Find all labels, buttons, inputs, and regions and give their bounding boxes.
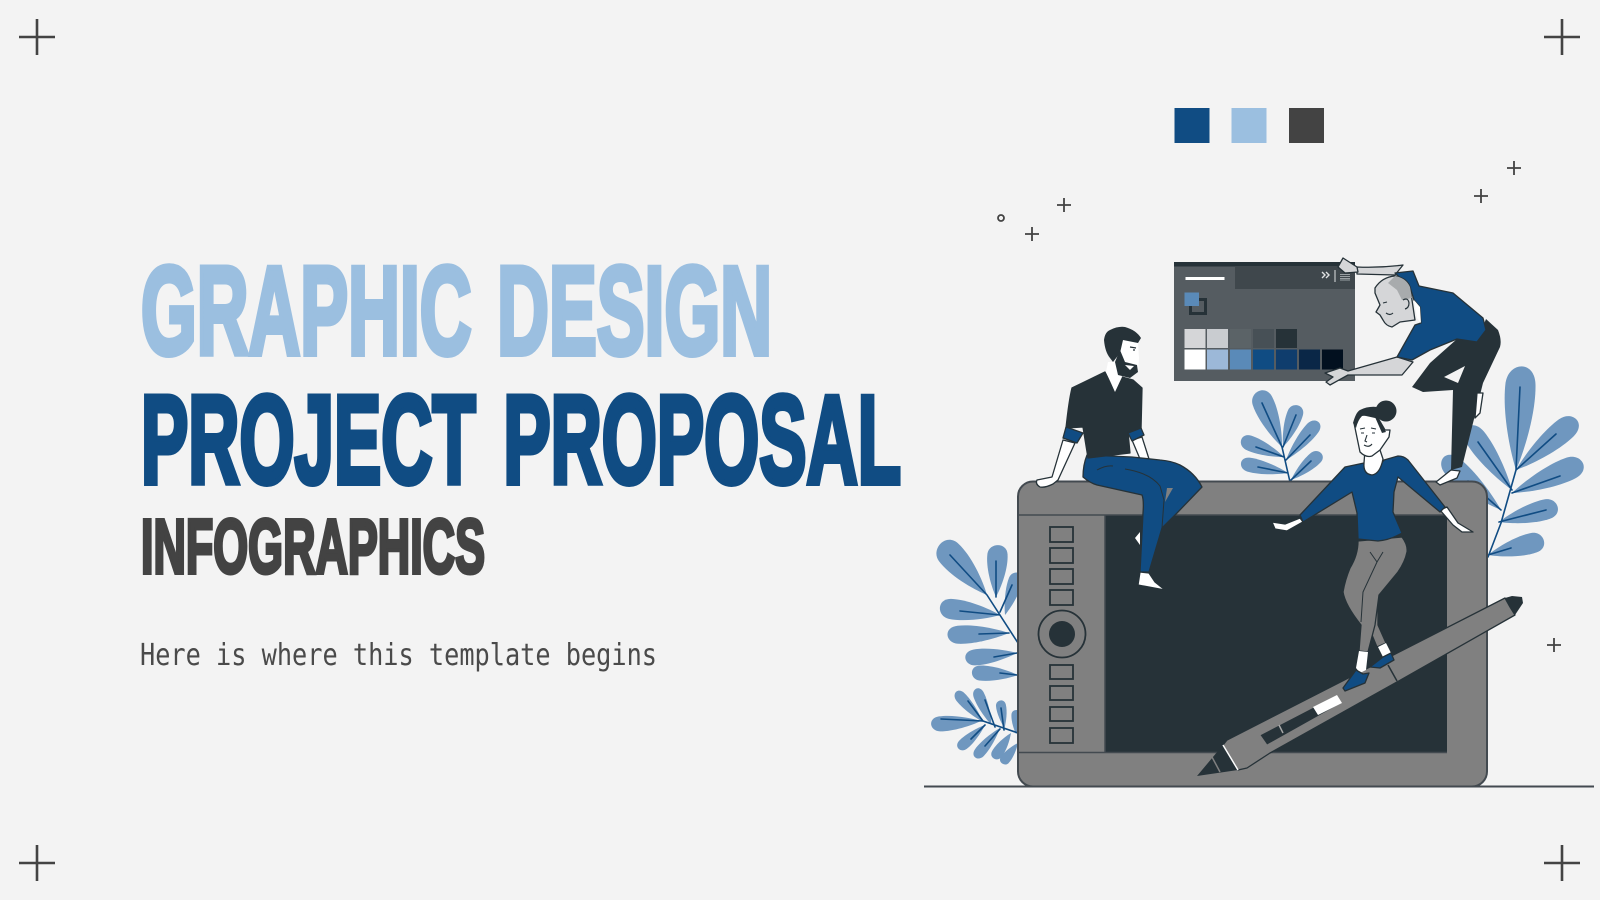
ground line: [924, 786, 1594, 788]
face: [1118, 340, 1139, 378]
hair: [1104, 327, 1141, 362]
front leg: [1343, 537, 1407, 652]
back leg: [1368, 610, 1386, 647]
facial features: [1383, 302, 1393, 314]
panel menu icons: [1322, 270, 1350, 282]
man bending near panel: [1325, 258, 1501, 485]
face: [1354, 414, 1390, 456]
trousers: [1083, 455, 1202, 572]
beard: [1115, 350, 1138, 378]
drawing tablet: [1018, 482, 1487, 786]
tablet buttons: [1050, 527, 1073, 743]
standing foot: [1436, 470, 1460, 485]
left hand: [1272, 518, 1303, 531]
title: infographics: INFOGRAPHICS: [141, 504, 485, 590]
back foot: [1135, 532, 1140, 545]
stylus pen: [1197, 596, 1523, 776]
trouser creases: [1097, 466, 1164, 528]
head: [1375, 276, 1415, 327]
trousers: [1412, 319, 1501, 470]
tablet dial: [1038, 610, 1086, 658]
shoe: [1343, 670, 1369, 691]
subtitle: Here is where this template begins: [140, 638, 657, 673]
title: graphic design: GRAPHIC DESIGN: [141, 242, 772, 381]
back shoe: [1370, 653, 1394, 668]
woman standing on pen: [1272, 400, 1473, 691]
plant: right: [1436, 366, 1587, 565]
small sparkle crosses: [998, 161, 1561, 652]
near arm and hand: [1036, 440, 1075, 487]
neck and chest: [1364, 450, 1383, 475]
lower arm and hand: [1325, 357, 1413, 385]
pen tip: [1197, 745, 1238, 776]
sock: [1356, 651, 1368, 673]
foot: [1138, 572, 1165, 590]
gap between the legs: [1165, 488, 1173, 502]
far arm: [1132, 437, 1149, 459]
right hand: [1440, 507, 1473, 532]
colour panel window: [1174, 262, 1355, 381]
shirt: [1066, 372, 1142, 458]
plant: centre: [1238, 387, 1326, 485]
man sitting on tablet: [1036, 327, 1202, 590]
upper hand: [1338, 258, 1358, 273]
colour palette squares: [1174, 108, 1324, 143]
pen cap: [1505, 596, 1523, 615]
pen button: [1260, 695, 1342, 745]
mouth: [1125, 365, 1134, 370]
facial features: [1360, 428, 1376, 446]
hair: [1388, 276, 1412, 300]
shirt: [1395, 271, 1486, 360]
plant: lower left bottom branch: [931, 687, 1022, 767]
tablet screen: [1105, 515, 1447, 753]
plant: lower left upper branch: [931, 535, 1025, 683]
upper arm: [1357, 265, 1403, 275]
colour swatches: [1184, 329, 1343, 370]
back sock: [1378, 643, 1391, 657]
leg lines: [1361, 552, 1383, 622]
overlapping fill and stroke squares: [1184, 292, 1206, 314]
ear: [1403, 299, 1409, 309]
neck and collar: [1106, 362, 1122, 392]
title: project proposal: PROJECT PROPOSAL: [141, 371, 901, 510]
raised foot: [1475, 393, 1483, 418]
top: [1300, 456, 1445, 541]
hair and bun: [1353, 407, 1386, 433]
collar: [1414, 300, 1421, 323]
eye: [1130, 347, 1136, 350]
plants behind the tablet: [931, 366, 1587, 767]
cuffs: [1063, 427, 1144, 443]
